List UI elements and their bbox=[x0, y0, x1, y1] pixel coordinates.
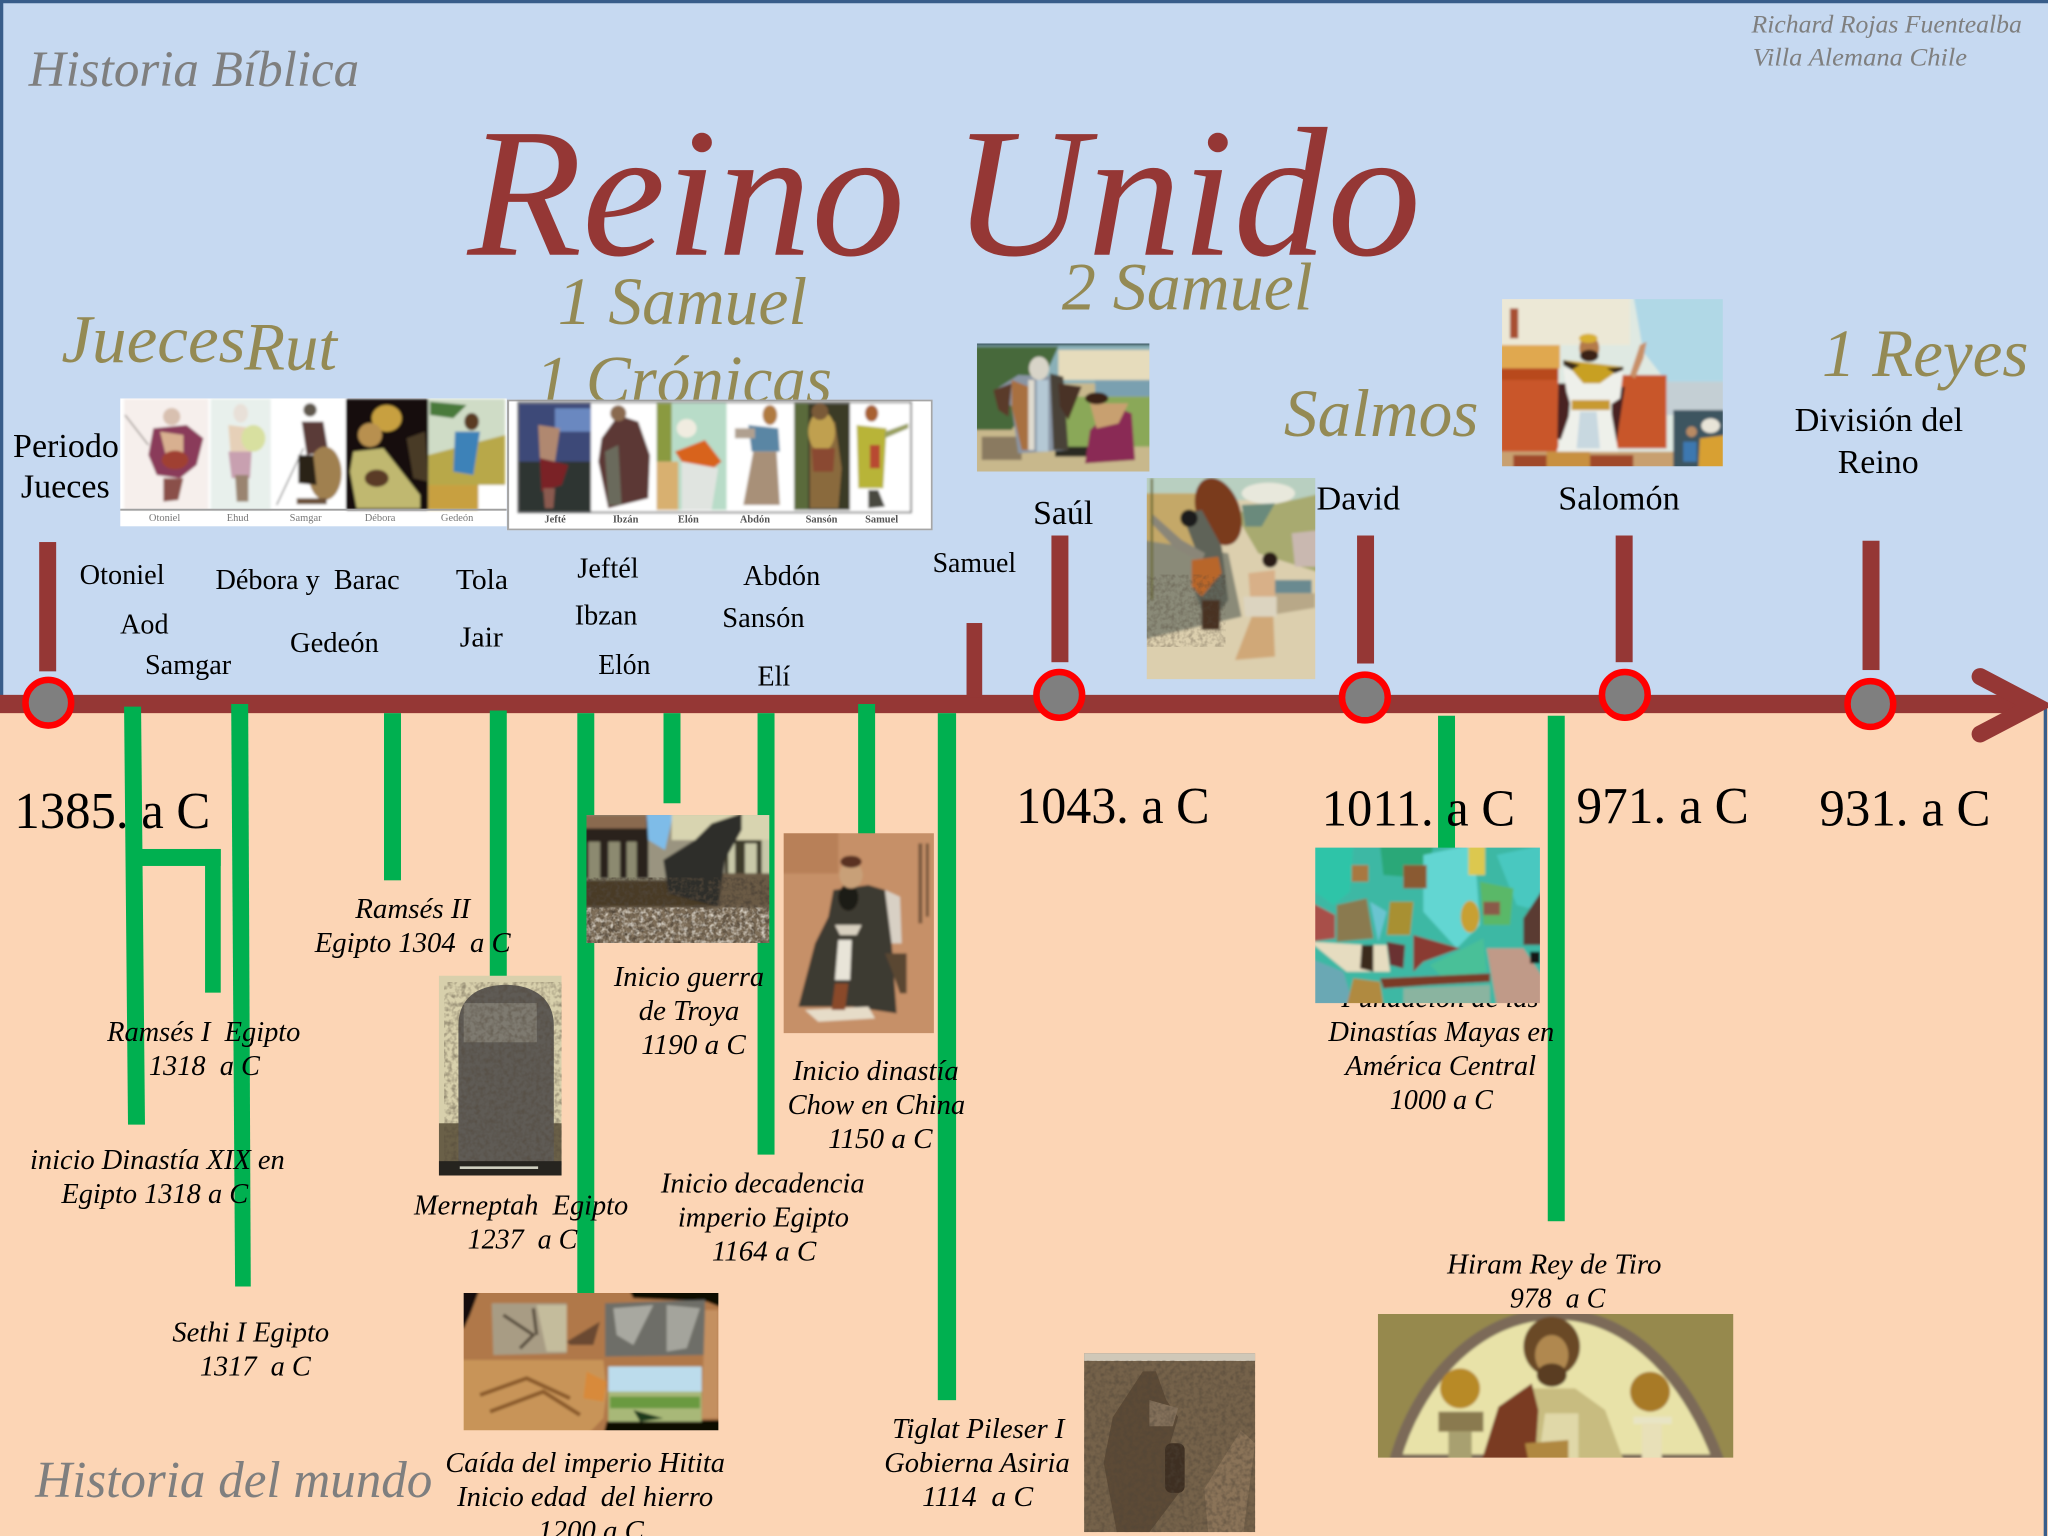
dates on the axis: 1385. a C bbox=[14, 782, 210, 840]
labels: judges: Elí bbox=[758, 661, 790, 693]
world events text: Inicio guerra bbox=[613, 961, 764, 993]
author credit bbox=[1750, 12, 2022, 71]
image: six more judges: Samuel bbox=[865, 514, 898, 525]
dates on the axis: 971. a C bbox=[1576, 777, 1749, 835]
image: six more judges: Elón bbox=[678, 514, 699, 525]
book names: Rut bbox=[243, 309, 339, 385]
section label: Historia del mundo: Historia del mundo bbox=[34, 1451, 432, 1509]
book names: Salmos bbox=[1284, 375, 1479, 451]
world events text: 1150 a C bbox=[828, 1123, 933, 1155]
labels: judges: Aod bbox=[120, 608, 169, 640]
labels: judges: Elón bbox=[598, 649, 650, 681]
world events text: 1114 a C bbox=[922, 1481, 1034, 1513]
image: six more judges: Sansón bbox=[806, 514, 838, 525]
labels: judges: Sansón bbox=[722, 602, 805, 634]
world events text: Egipto 1318 a C bbox=[60, 1178, 249, 1210]
labels: judges bbox=[13, 428, 1016, 693]
dates on the axis: 1011. a C bbox=[1322, 779, 1515, 837]
labels: judges: Samuel bbox=[933, 547, 1016, 579]
labels: judges: Abdón bbox=[743, 560, 820, 592]
world events text: Gobierna Asiria bbox=[884, 1447, 1070, 1479]
world events text: Tiglat Pileser I bbox=[892, 1413, 1066, 1445]
book names: 1 Reyes bbox=[1822, 315, 2028, 391]
author credit: Richard Rojas Fuentealba bbox=[1750, 12, 2022, 39]
image: David and Goliath bbox=[1146, 478, 1316, 680]
image: Solomon at the altar bbox=[1500, 295, 1727, 472]
world events text: 1317 a C bbox=[200, 1350, 312, 1382]
image: Trojan horse bbox=[585, 810, 775, 947]
image: Hittite collage bbox=[460, 1288, 723, 1435]
world events text: 1190 a C bbox=[641, 1029, 747, 1061]
labels: judges: Ibzan bbox=[575, 599, 637, 631]
background: Biblical history band bbox=[0, 0, 2048, 705]
world events text: imperio Egipto bbox=[678, 1201, 849, 1233]
labels: judges: Samgar bbox=[145, 649, 232, 681]
image: first five judges: Gedeón bbox=[441, 513, 474, 524]
world events text: 1237 a C bbox=[468, 1224, 578, 1256]
image: Samuel and Saul bbox=[977, 344, 1150, 472]
world events text: Inicio edad del hierro bbox=[456, 1481, 713, 1513]
labels: kings: David bbox=[1317, 480, 1400, 517]
world events text: Merneptah Egipto bbox=[413, 1190, 628, 1222]
world events text: Fundación de las bbox=[1340, 982, 1539, 1014]
image: first five judges: Samgar bbox=[290, 513, 322, 524]
image: first five judges bbox=[120, 398, 507, 526]
labels: kings bbox=[1033, 402, 1963, 532]
world events text: Caída del imperio Hitita bbox=[445, 1447, 725, 1479]
green event bars bbox=[124, 704, 1565, 1400]
world events text: 1164 a C bbox=[712, 1235, 817, 1267]
background: world history band bbox=[0, 705, 2048, 1536]
book names: 2 Samuel bbox=[1062, 249, 1313, 325]
image: Maya mural bbox=[1310, 845, 1543, 1005]
timeline markers bbox=[25, 672, 1893, 727]
book names: Jueces bbox=[61, 301, 246, 377]
dates on the axis: 931. a C bbox=[1819, 779, 1991, 837]
image: six more judges: Abdón bbox=[740, 514, 770, 525]
labels: judges: Periodo bbox=[13, 428, 119, 465]
labels: judges: Tola bbox=[456, 564, 508, 596]
timeline axis with arrow bbox=[0, 677, 2035, 734]
dates on the axis bbox=[14, 777, 1991, 840]
world events text: Hiram Rey de Tiro bbox=[1446, 1248, 1661, 1280]
labels: kings: Saúl bbox=[1033, 495, 1093, 532]
image: first five judges: Otoniel bbox=[149, 513, 180, 524]
world events text: 978 a C bbox=[1510, 1282, 1606, 1314]
labels: judges: Débora y Barac bbox=[216, 564, 400, 596]
image: six more judges bbox=[507, 400, 933, 530]
book names: 1 Samuel bbox=[558, 263, 807, 339]
world events text: Chow en China bbox=[788, 1089, 965, 1121]
title: Reino Unido bbox=[467, 91, 1421, 295]
world events text: Ramsés II bbox=[354, 893, 472, 925]
image: Merneptah stela bbox=[439, 976, 567, 1176]
labels: judges: Jair bbox=[460, 622, 503, 654]
labels: judges: Jueces bbox=[21, 469, 110, 506]
book names: 1 Crónicas bbox=[536, 341, 832, 417]
image: Hiram of Tyre bbox=[1375, 1310, 1738, 1460]
image: first five judges: Débora bbox=[365, 513, 396, 524]
image: first five judges: Ehud bbox=[227, 513, 250, 524]
world events text: Sethi I Egipto bbox=[172, 1316, 329, 1348]
world events text: Inicio dinastía bbox=[792, 1055, 959, 1087]
labels: kings: Salomón bbox=[1558, 480, 1680, 517]
image: six more judges: Ibzán bbox=[613, 514, 639, 525]
world events text: Ramsés I Egipto bbox=[106, 1016, 300, 1048]
labels: kings: División del bbox=[1795, 402, 1963, 439]
labels: judges: Jeftél bbox=[577, 552, 639, 584]
world events text: Egipto 1304 a C bbox=[314, 927, 512, 959]
image: six more judges: Jefté bbox=[544, 514, 566, 525]
world events text: de Troya bbox=[639, 995, 739, 1027]
labels: judges: Gedeón bbox=[290, 627, 379, 659]
dates on the axis: 1043. a C bbox=[1016, 777, 1209, 835]
image: Chow dynasty portrait bbox=[784, 833, 934, 1034]
labels: judges: Otoniel bbox=[80, 559, 165, 591]
maroon stems bbox=[39, 536, 1880, 697]
book names bbox=[61, 249, 2028, 451]
world events text: 1000 a C bbox=[1390, 1084, 1494, 1116]
world events text: Dinastías Mayas en bbox=[1327, 1016, 1554, 1048]
world events text: América Central bbox=[1343, 1050, 1536, 1082]
section label: Historia Bíblica: Historia Bíblica bbox=[28, 42, 359, 98]
image: Assyrian relief bbox=[1084, 1353, 1255, 1532]
labels: kings: Reino bbox=[1838, 444, 1919, 481]
world events text bbox=[30, 893, 1661, 1536]
world events text: 1318 a C bbox=[149, 1050, 261, 1082]
world events text: Inicio decadencia bbox=[660, 1167, 865, 1199]
world events text: inicio Dinastía XIX en bbox=[30, 1144, 285, 1176]
author credit: Villa Alemana Chile bbox=[1753, 44, 1967, 71]
